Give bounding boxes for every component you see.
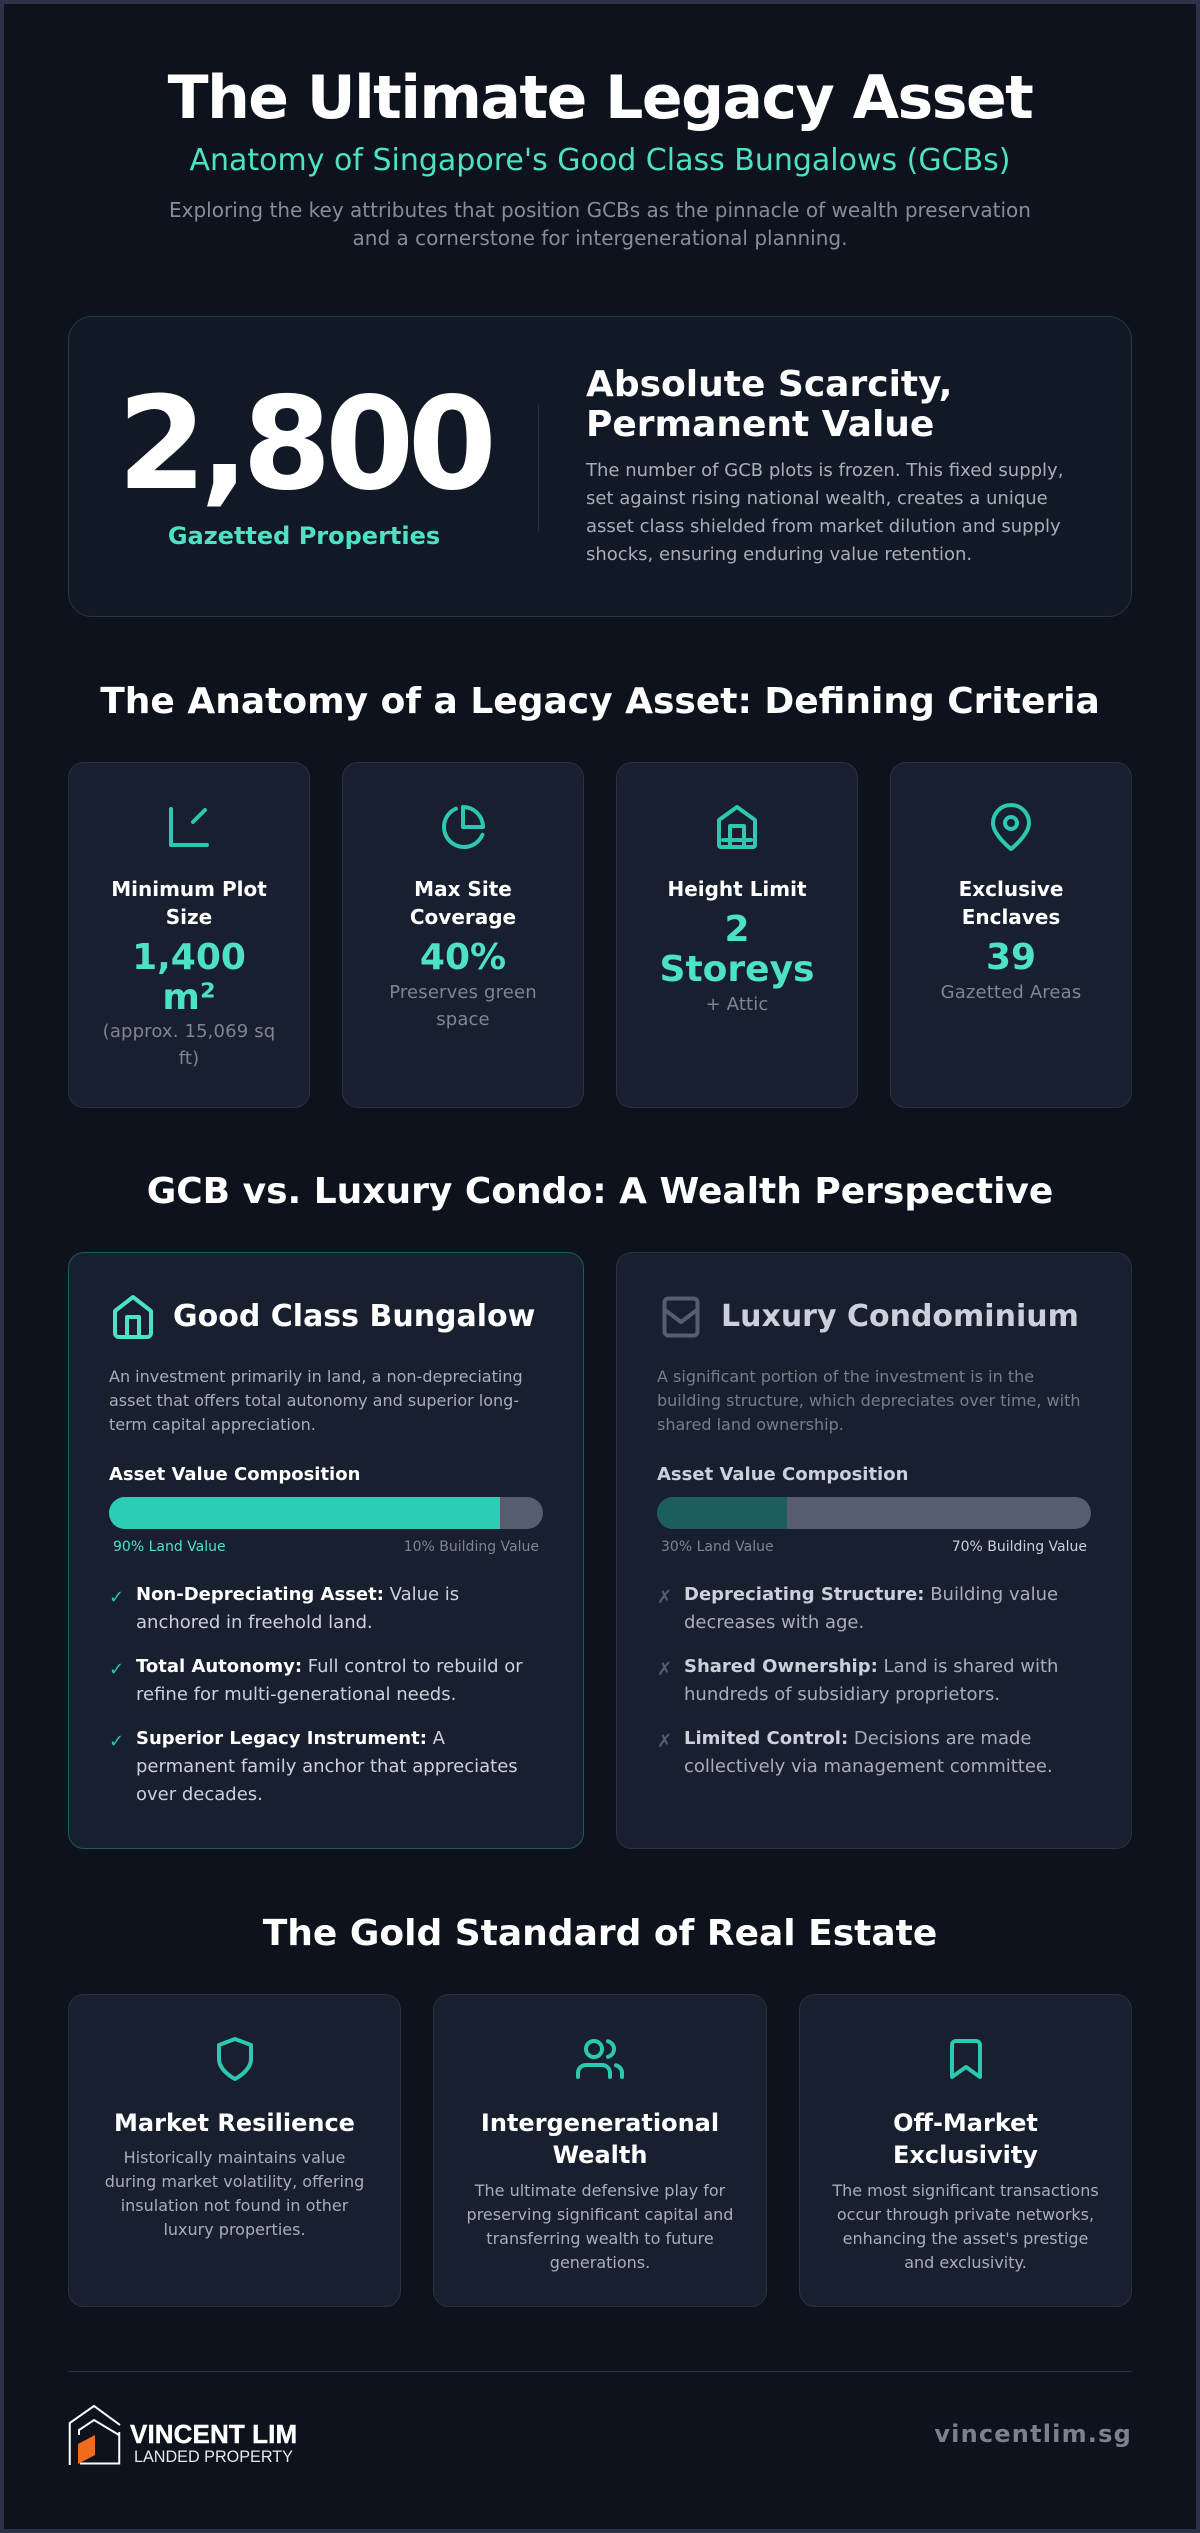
wealth text (467, 2181, 733, 2272)
panel: height limit (616, 762, 858, 1108)
icon: condo box (662, 1296, 700, 1338)
wealth text: The ultimate defensive play for (475, 2181, 725, 2200)
gcb point 2 (109, 1656, 523, 1705)
coverage title: Coverage (410, 905, 516, 929)
enclaves value: 39 (986, 937, 1036, 978)
title: The Ultimate Legacy Asset (168, 63, 1032, 133)
land label: 90% Land Value (113, 1539, 226, 1555)
gcb description: asset that offers total autonomy and superior long- (109, 1391, 519, 1410)
condo point 1 (657, 1584, 1058, 1633)
point text: hundreds of subsidiary proprietors. (684, 1684, 1000, 1705)
icon: plot corner (169, 807, 209, 847)
gcb title: Good Class Bungalow (173, 1299, 535, 1334)
land share (657, 1497, 787, 1529)
wealth text: preserving significant capital and (467, 2205, 733, 2224)
intro text (169, 198, 1031, 250)
resilience text: insulation not found in other (121, 2196, 348, 2215)
footer logo (68, 2404, 297, 2466)
point text (684, 1728, 1053, 1777)
building label: 10% Building Value (404, 1539, 539, 1555)
hero body text: shocks, ensuring enduring value retention. (586, 544, 972, 565)
point text: Superior Legacy Instrument: A (136, 1728, 445, 1749)
point text: over decades. (136, 1784, 263, 1805)
plot title: Minimum Plot (111, 877, 267, 901)
icon: pie chart (442, 805, 485, 849)
exclusivity text: enhancing the asset's prestige (843, 2229, 1088, 2248)
enclaves title (959, 877, 1063, 929)
point text: anchored in freehold land. (136, 1612, 373, 1633)
exclusivity title: Off-Market (893, 2109, 1038, 2137)
panel: minimum plot size (68, 762, 310, 1108)
point text: collectively via management committee. (684, 1756, 1053, 1777)
hero body text: set against rising national wealth, creates a unique (586, 488, 1048, 509)
point text: Shared Ownership: Land is shared with (684, 1656, 1058, 1677)
hero number: 2,800 (118, 370, 490, 519)
hero body text: The number of GCB plots is frozen. This fixed supply, (586, 460, 1063, 481)
exclusivity title (893, 2109, 1038, 2169)
hero divider (538, 404, 539, 532)
height value: Storeys (660, 949, 814, 990)
icon: bookmark (950, 2039, 982, 2080)
hero heading: Absolute Scarcity, (586, 364, 952, 405)
point text: Total Autonomy: Full control to rebuild or (136, 1656, 523, 1677)
condo point 3 (657, 1728, 1053, 1777)
gcb description: term capital appreciation. (109, 1415, 316, 1434)
cross mark: ✗ (657, 1587, 672, 1608)
condo composition bar (657, 1497, 1091, 1529)
land label: 30% Land Value (661, 1539, 774, 1555)
wealth text: generations. (550, 2253, 650, 2272)
check mark: ✓ (109, 1659, 124, 1680)
point text: permanent family anchor that appreciates (136, 1756, 518, 1777)
exclusivity text: The most significant transactions (832, 2181, 1099, 2200)
condo title: Luxury Condominium (721, 1299, 1079, 1334)
gcb point 3 (109, 1728, 518, 1805)
icon: logo house (68, 2404, 120, 2465)
condo description: building structure, which depreciates over time, with (657, 1391, 1080, 1410)
building label: 70% Building Value (952, 1539, 1087, 1555)
heading: defining criteria: The Anatomy of a Legacy Asset: Defining Criteria (100, 681, 1100, 722)
icon: people (576, 2039, 624, 2079)
condo composition label: Asset Value Composition (657, 1464, 908, 1485)
cross mark: ✗ (657, 1731, 672, 1752)
wealth title (481, 2109, 719, 2169)
wealth title: Wealth (553, 2141, 647, 2169)
gcb description (109, 1367, 523, 1434)
resilience title: Market Resilience (114, 2109, 355, 2137)
panel: good class bungalow (68, 1252, 584, 1849)
plot value (132, 937, 246, 1018)
panel: market resilience (68, 1994, 401, 2307)
check mark: ✓ (109, 1731, 124, 1752)
plot title: Size (166, 905, 212, 929)
hero heading (586, 364, 952, 445)
exclusivity title: Exclusivity (893, 2141, 1038, 2169)
check mark: ✓ (109, 1587, 124, 1608)
heading: gold standard: The Gold Standard of Real Estate (263, 1913, 937, 1954)
enclaves title: Enclaves (962, 905, 1060, 929)
coverage note: space (436, 1009, 490, 1030)
plot note: (approx. 15,069 sq (103, 1021, 275, 1042)
plot note: ft) (179, 1048, 199, 1069)
coverage value: 40% (420, 937, 506, 978)
point text: Non-Depreciating Asset: Value is (136, 1584, 459, 1605)
footer url: vincentlim.sg (934, 2420, 1132, 2448)
icon: home (113, 1295, 153, 1339)
footer divider (68, 2371, 1132, 2372)
logo tagline: LANDED PROPERTY (134, 2448, 293, 2466)
icon: map pin (991, 803, 1031, 851)
enclaves title: Exclusive (959, 877, 1063, 901)
wealth text: transferring wealth to future (486, 2229, 714, 2248)
enclaves note: Gazetted Areas (941, 982, 1081, 1003)
resilience text: Historically maintains value (124, 2148, 345, 2167)
height title: Height Limit (667, 877, 807, 901)
condo description: shared land ownership. (657, 1415, 844, 1434)
point text (136, 1728, 518, 1805)
gcb description: An investment primarily in land, a non-depreciating (109, 1367, 523, 1386)
intro text: Exploring the key attributes that position GCBs as the pinnacle of wealth preservation (169, 198, 1031, 222)
icon: house (717, 805, 757, 849)
coverage title (410, 877, 516, 929)
condo description (657, 1367, 1080, 1434)
height note: + Attic (706, 994, 768, 1015)
plot title (111, 877, 267, 929)
panel: exclusive enclaves (890, 762, 1132, 1108)
point text: decreases with age. (684, 1612, 864, 1633)
resilience text (105, 2148, 364, 2239)
panel: luxury condominium (616, 1252, 1132, 1849)
hero heading: Permanent Value (586, 404, 934, 445)
point text (684, 1656, 1058, 1705)
exclusivity text: occur through private networks, (837, 2205, 1094, 2224)
point text: refine for multi-generational needs. (136, 1684, 456, 1705)
heading: comparison: GCB vs. Luxury Condo: A Wealth Perspective (147, 1171, 1053, 1212)
point text (684, 1584, 1058, 1633)
panel: max site coverage (342, 762, 584, 1108)
intro text: and a cornerstone for intergenerational planning. (353, 226, 847, 250)
exclusivity text (832, 2181, 1099, 2272)
plot note (103, 1021, 275, 1069)
point text (136, 1656, 523, 1705)
hero body text (586, 460, 1063, 565)
hero label: Gazetted Properties (168, 522, 440, 550)
gcb composition label: Asset Value Composition (109, 1464, 360, 1485)
height value (660, 909, 814, 990)
point text: Limited Control: Decisions are made (684, 1728, 1032, 1749)
panel: hero scarcity (68, 316, 1132, 617)
point text (136, 1584, 459, 1633)
point text: Depreciating Structure: Building value (684, 1584, 1058, 1605)
cross mark: ✗ (657, 1659, 672, 1680)
condo description: A significant portion of the investment is in the (657, 1367, 1034, 1386)
hero body text: asset class shielded from market dilution and supply (586, 516, 1061, 537)
wealth title: Intergenerational (481, 2109, 719, 2137)
land share (109, 1497, 500, 1529)
gcb point 1 (109, 1584, 459, 1633)
resilience text: luxury properties. (163, 2220, 306, 2239)
logo name: VINCENT LIM (130, 2419, 297, 2449)
coverage title: Max Site (414, 877, 512, 901)
coverage note: Preserves green (389, 982, 537, 1003)
gcb composition bar (109, 1497, 543, 1529)
subtitle: Anatomy of Singapore's Good Class Bungalows (GCBs) (189, 143, 1010, 178)
coverage note (389, 982, 537, 1030)
height value: 2 (724, 909, 750, 950)
condo point 2 (657, 1656, 1058, 1705)
plot value: m² (162, 977, 216, 1018)
plot value: 1,400 (132, 937, 246, 978)
resilience text: during market volatility, offering (105, 2172, 364, 2191)
icon: shield (217, 2037, 253, 2081)
exclusivity text: and exclusivity. (904, 2253, 1027, 2272)
panel: off-market exclusivity (799, 1994, 1132, 2307)
panel: intergenerational wealth (433, 1994, 767, 2307)
